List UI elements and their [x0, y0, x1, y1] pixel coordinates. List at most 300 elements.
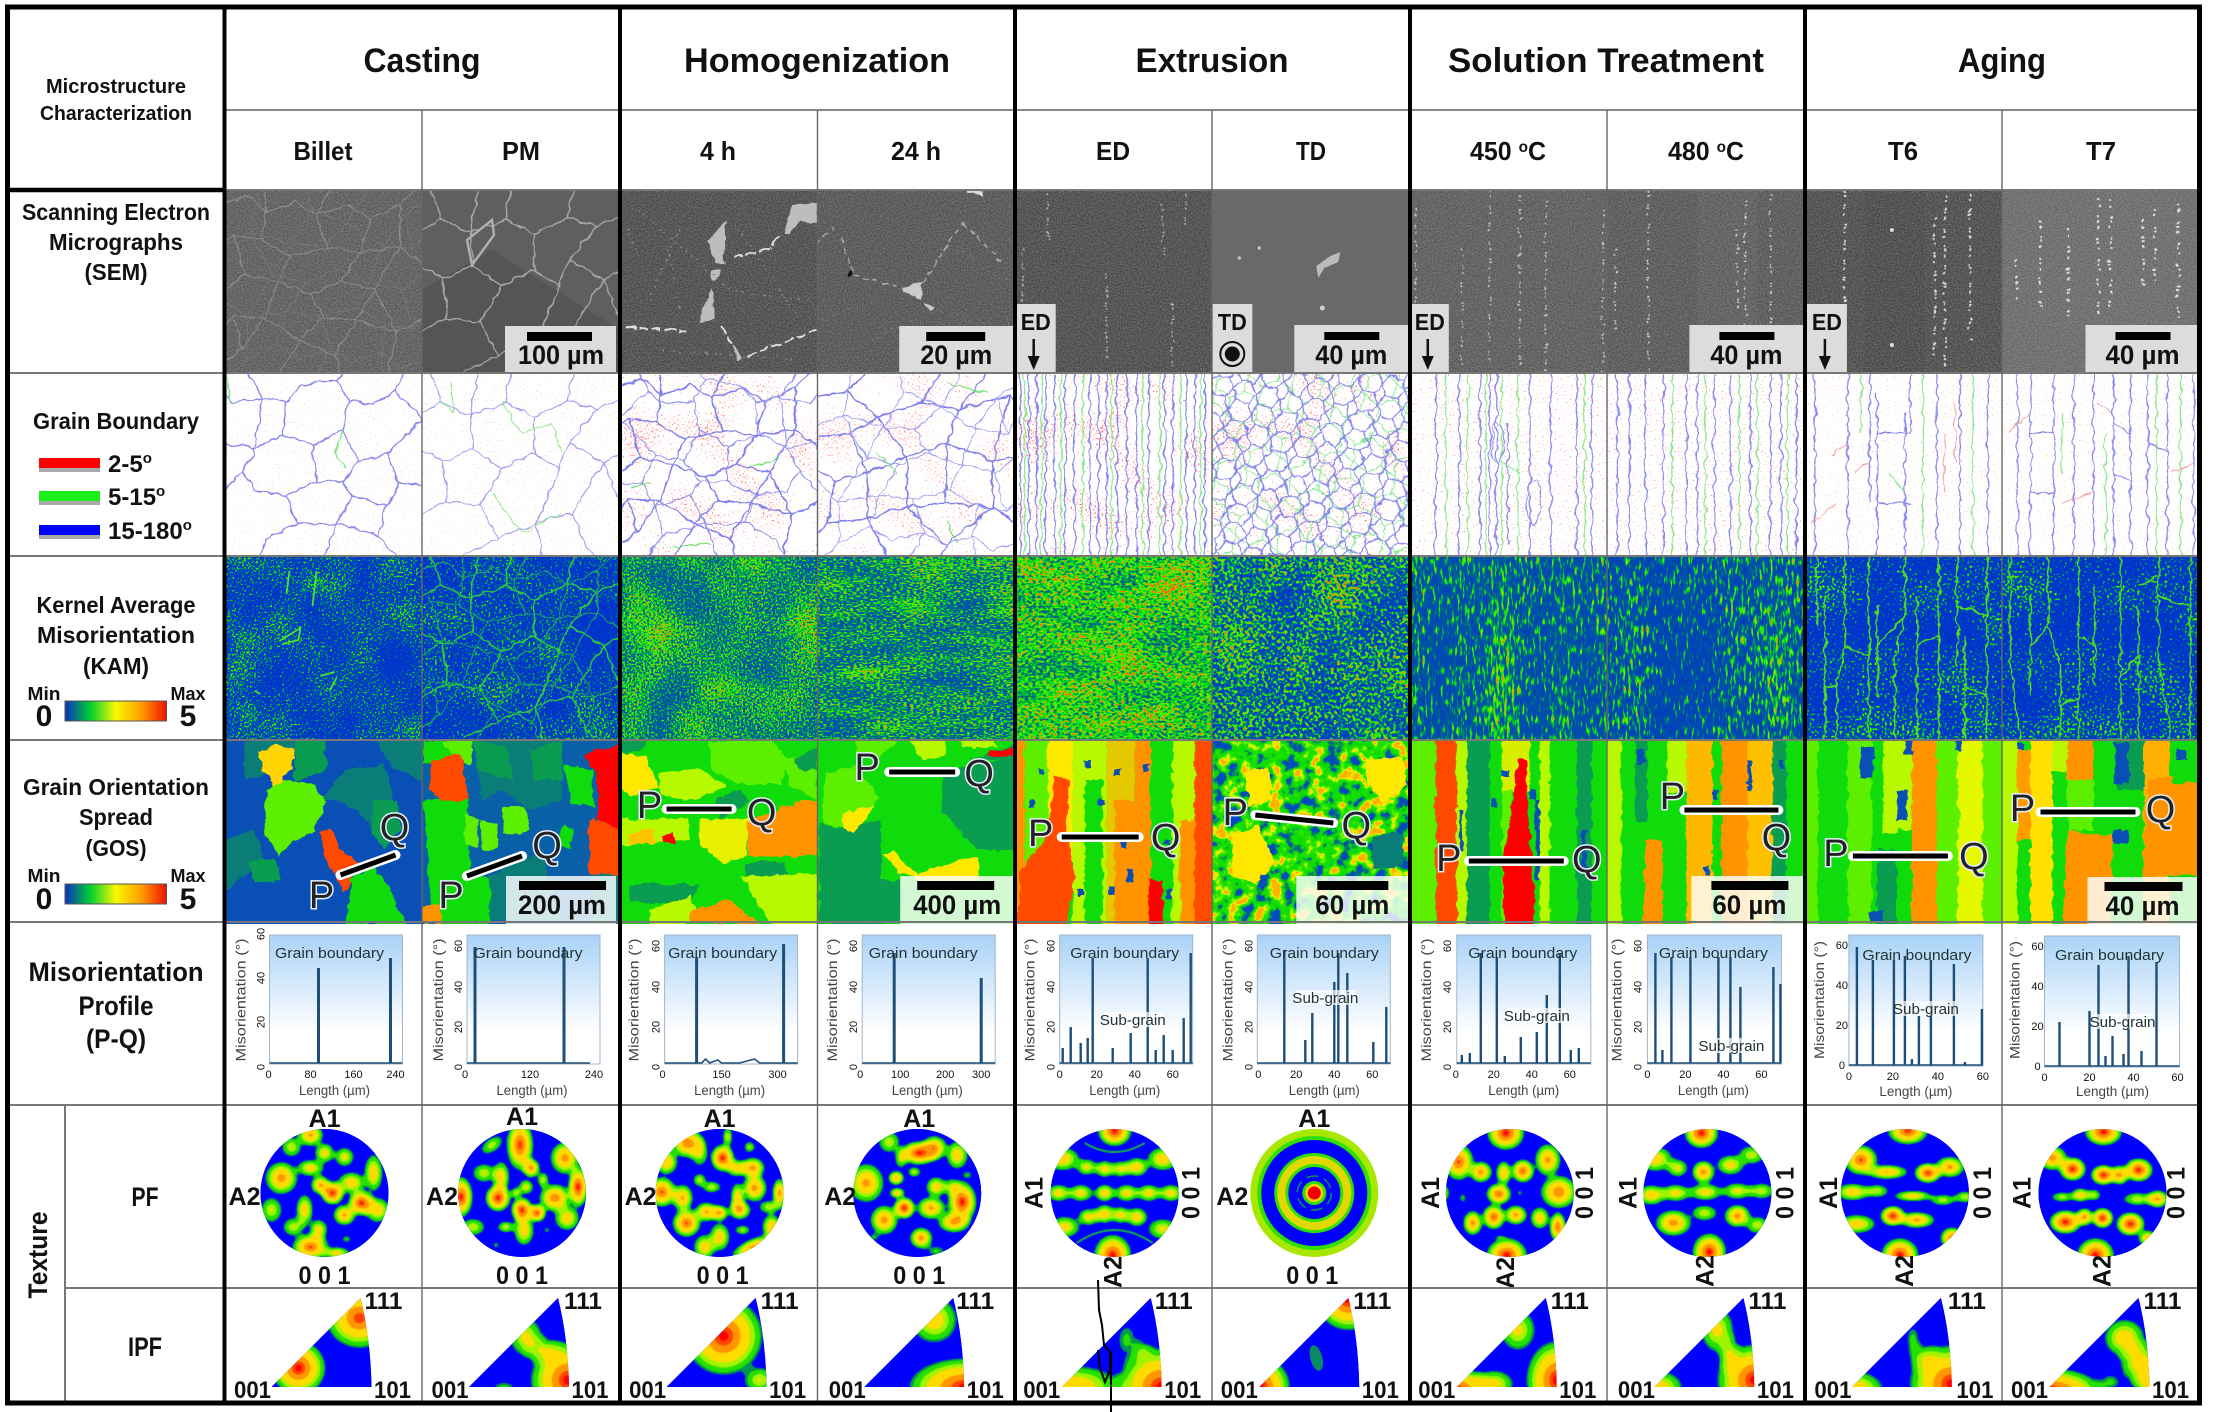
profile chart: Billet: Grain boundary [275, 946, 385, 962]
profile chart: TD: Sub-grain [1292, 991, 1358, 1007]
IPF: 480 C: 101 [1757, 1377, 1794, 1404]
profile chart: Billet: 160 [344, 1069, 363, 1081]
direction marker: TD: TD [1218, 309, 1247, 335]
profile chart: ED: 20 [1091, 1069, 1103, 1081]
IPF: 24 h [817, 1288, 1031, 1412]
KAM: 24 h [817, 556, 1015, 740]
P-Q marker: PM [438, 825, 562, 917]
colour scale: GOS: 5 [180, 883, 196, 916]
IPF: TD: 101 [1362, 1377, 1399, 1404]
panel: KAM row [224, 556, 2200, 740]
scale bar: 40 µm [2106, 891, 2180, 921]
profile chart: 480 C: 20 [1632, 1021, 1644, 1033]
P-Q marker: 24 h [855, 747, 994, 795]
grain boundaries: 4 h [620, 373, 818, 557]
profile chart: T7: 40 [2031, 981, 2044, 993]
profile chart: TD: Grain boundary [1270, 946, 1380, 962]
profile chart: 450 C: Grain boundary [1468, 946, 1578, 962]
pole figure: 4 h: A2 [625, 1183, 657, 1211]
profile chart: T7: 0 [2034, 1061, 2041, 1073]
pole figure: T7: 0 0 1 [2162, 1167, 2190, 1219]
profile chart: T6 [1811, 935, 1989, 1099]
sub-headings: conditions: T6 [1888, 136, 1918, 166]
scale bar [2086, 325, 2198, 374]
profile chart: 480 C: 40 [1717, 1069, 1730, 1081]
IPF: T7: 101 [2152, 1377, 2189, 1404]
P-Q marker: 480 C: Q [1762, 817, 1791, 859]
direction marker: TD [1212, 304, 1252, 374]
KAM: 4 h [620, 556, 818, 740]
heading: Extrusion: Extrusion [1136, 42, 1288, 80]
pole figure: TD [1216, 1105, 1378, 1290]
pole figure: TD: 0 0 1 [1286, 1262, 1338, 1290]
IPF: Billet: 001 [234, 1377, 271, 1404]
scale bar: 40 µm [1315, 340, 1387, 370]
pole figure: Billet: A1 [308, 1105, 341, 1133]
profile chart: T7: Misorientation (°) [2006, 941, 2022, 1059]
profile chart: 450 C: 0 [1453, 1069, 1459, 1081]
IPF: T7: 111 [2144, 1288, 2182, 1315]
panel: row labels [22, 199, 210, 1362]
profile chart: 24 h: 0 [857, 1069, 863, 1081]
scale bar [900, 876, 1015, 924]
direction marker: ED [1410, 304, 1449, 374]
P-Q marker: 24 h: Q [964, 753, 994, 795]
profile chart: PM: Length (µm) [496, 1082, 568, 1098]
GOS: T7 [1996, 732, 2206, 940]
profile chart: 480 C: Sub-grain [1698, 1039, 1764, 1055]
profile chart: 4 h: 20 [651, 1021, 663, 1033]
SEM: 480 C [1607, 190, 1805, 374]
panel: misorientation profile row [232, 928, 2184, 1099]
scale bar [1294, 325, 1410, 374]
colour scale: GOS: Min [28, 866, 60, 886]
IPF: PM: 001 [432, 1377, 468, 1404]
IPF: TD: 001 [1221, 1377, 1258, 1404]
legend: grain boundary angles: 5-15 [108, 484, 156, 511]
direction marker: ED: ED [1021, 309, 1051, 335]
IPF: 4 h [620, 1288, 818, 1404]
profile chart: 450 C: Misorientation (°) [1418, 939, 1434, 1061]
profile chart: 24 h: 60 [848, 940, 860, 952]
pole figure: T6: A2 [1891, 1255, 1919, 1287]
profile chart: T6: Misorientation (°) [1811, 941, 1827, 1059]
profile chart: 4 h: 150 [712, 1069, 731, 1081]
colour scale: KAM [28, 684, 206, 733]
profile chart: Billet: Length (µm) [299, 1082, 370, 1098]
P-Q marker: ED: P [1028, 813, 1053, 855]
profile chart: TD: Misorientation (°) [1219, 939, 1235, 1061]
GOS: TD [1212, 740, 1410, 924]
scale bar: 100 µm [518, 340, 604, 370]
profile chart: 480 C: 60 [1755, 1069, 1768, 1081]
KAM: TD [1212, 556, 1410, 740]
panel: column headers [40, 42, 2116, 166]
profile chart: Billet: 60 [256, 928, 268, 940]
profile chart: Billet: 40 [256, 972, 268, 984]
profile chart: TD: Length (µm) [1289, 1082, 1360, 1098]
GOS: T6 [1799, 732, 2009, 932]
profile chart: T6: 40 [1836, 980, 1848, 992]
KAM: T7 [2002, 556, 2200, 740]
profile chart: Billet: 20 [256, 1016, 268, 1028]
profile chart: T7: Grain boundary [2055, 948, 2165, 964]
profile chart: 4 h: Misorientation (°) [626, 939, 642, 1061]
profile chart: T6: 60 [1977, 1071, 1989, 1083]
row label: GOS: Grain Orientation [23, 774, 209, 800]
pole figure: 4 h [620, 1105, 818, 1290]
profile chart: TD [1219, 935, 1390, 1098]
P-Q marker: T7 [2010, 788, 2175, 831]
scale bar: 20 µm [920, 340, 992, 370]
IPF: 450 C: 111 [1551, 1288, 1589, 1315]
pole figure: 450 C: 0 0 1 [1571, 1167, 1599, 1219]
profile chart: 480 C: 40 [1632, 981, 1644, 993]
scale bar [899, 326, 1015, 374]
stray pen mark [1098, 1280, 1111, 1412]
scale bar [505, 326, 616, 374]
profile chart: TD: 40 [1243, 981, 1255, 993]
GOS: ED [1009, 732, 1219, 932]
pole figure: 24 h: A2 [824, 1183, 856, 1211]
IPF: 480 C [1607, 1288, 1805, 1412]
row label: misorientation profile: Profile [78, 991, 154, 1021]
row label: Texture: Texture [23, 1212, 53, 1298]
pole figure: T7 [2002, 1105, 2200, 1289]
profile chart: Billet: 240 [386, 1069, 405, 1081]
SEM: ED [1015, 190, 1213, 374]
P-Q marker: 480 C [1660, 776, 1791, 859]
profile chart: ED: 40 [1129, 1069, 1141, 1081]
IPF: 24 h: 001 [829, 1377, 866, 1404]
IPF: T7: 001 [2011, 1377, 2048, 1404]
sub-headings: conditions: TD [1296, 136, 1326, 166]
scale bar [506, 876, 616, 924]
profile chart: 4 h: 0 [651, 1064, 663, 1070]
profile chart: T6: Sub-grain [1893, 1002, 1959, 1018]
scale bar: 60 µm [1712, 890, 1786, 920]
legend: grain boundary angles: o [156, 483, 165, 500]
profile chart: Billet: 0 [256, 1064, 268, 1070]
colour scale: KAM: 0 [36, 700, 52, 733]
profile chart: ED: 60 [1167, 1069, 1179, 1081]
pole figure: T6: 0 0 1 [1969, 1167, 1997, 1219]
KAM: Billet [224, 556, 422, 740]
grain boundaries: Billet [224, 373, 422, 557]
pole figure: PM: A2 [426, 1183, 458, 1211]
row label: KAM: (KAM) [83, 653, 149, 679]
heading: Homogenization: Homogenization [684, 42, 950, 80]
profile chart: 24 h: Grain boundary [869, 946, 979, 962]
IPF: 480 C: 001 [1618, 1377, 1655, 1404]
sub-headings: conditions: 450 [1470, 136, 1513, 166]
profile chart: 4 h: Length (µm) [694, 1082, 765, 1098]
profile chart: T7: 60 [2171, 1072, 2184, 1084]
scale bar: 40 µm [1710, 340, 1782, 370]
scale bar [1691, 876, 1803, 924]
P-Q marker: Billet: Q [380, 807, 409, 849]
grain boundaries: 450 C [1410, 373, 1608, 557]
row label: misorientation profile [28, 957, 204, 1054]
row label: SEM: Scanning Electron [22, 199, 210, 225]
pole figure: 480 C [1607, 1105, 1805, 1289]
pole figure: PM: A1 [506, 1103, 538, 1131]
pole figure: 4 h: A1 [704, 1105, 736, 1133]
grain boundaries: TD [1212, 373, 1410, 557]
IPF: 4 h: 001 [629, 1377, 666, 1404]
grain boundaries: T7 [2002, 373, 2200, 557]
profile chart: 450 C: 20 [1442, 1021, 1454, 1033]
sub-headings: conditions: T7 [2086, 136, 2116, 166]
P-Q marker: T6: Q [1959, 836, 1989, 878]
scale bar: 400 µm [913, 890, 1001, 920]
pole figure: ED: 0 0 1 [1178, 1167, 1206, 1219]
IPF: TD [1212, 1260, 1410, 1412]
IPF: 24 h: 111 [956, 1288, 994, 1315]
profile chart: 450 C: 40 [1442, 981, 1454, 993]
panel: P-Q line markers [309, 747, 2175, 917]
pole figure: ED: A2 [1100, 1256, 1128, 1288]
profile chart: 4 h: Grain boundary [668, 946, 778, 962]
profile chart: TD: 40 [1328, 1069, 1340, 1081]
profile chart: Billet: 0 [265, 1069, 272, 1081]
colour scale: GOS: Max [170, 866, 206, 886]
P-Q marker: Billet: P [309, 875, 334, 917]
sub-headings: conditions: 24 h [891, 136, 941, 166]
profile chart: 24 h: Misorientation (°) [824, 939, 840, 1061]
profile chart: 24 h: 40 [848, 981, 860, 993]
sub-headings: conditions: o [1519, 139, 1528, 156]
pole figure: 450 C: A2 [1492, 1257, 1520, 1289]
sub-headings: conditions [294, 136, 2116, 166]
IPF: ED: 111 [1155, 1288, 1193, 1315]
profile chart: PM: 0 [462, 1069, 468, 1081]
IPF: 24 h: 101 [967, 1377, 1004, 1404]
GOS: 24 h [817, 740, 1015, 924]
SEM: 4 h [620, 190, 818, 374]
IPF: T6 [1805, 1288, 2003, 1412]
profile chart: T7: Length (µm) [2076, 1083, 2149, 1099]
legend: grain boundary angles: 15-180 [108, 518, 183, 545]
KAM: ED [1015, 556, 1213, 740]
grain boundaries: 24 h [817, 373, 1015, 557]
legend: grain boundary angles: o [143, 450, 152, 467]
row label: KAM: Misorientation [37, 622, 195, 648]
profile chart: ED: 60 [1046, 940, 1058, 952]
profile chart: ED: Length (µm) [1089, 1082, 1160, 1098]
profile chart: 450 C: Sub-grain [1504, 1009, 1570, 1025]
P-Q marker: 450 C: P [1436, 838, 1461, 880]
profile chart: TD: 60 [1243, 940, 1255, 952]
pole figure: T7: A2 [2088, 1255, 2116, 1287]
IPF: 4 h: 111 [761, 1288, 799, 1315]
scale bar [1296, 876, 1408, 924]
P-Q marker: 24 h: P [855, 747, 880, 789]
panel: GOS row [224, 732, 2206, 940]
P-Q marker: TD: P [1223, 792, 1248, 834]
profile chart: T6: 20 [1887, 1071, 1899, 1083]
scale bar: 60 µm [1315, 890, 1389, 920]
row label: misorientation profile: Misorientation [28, 957, 204, 987]
pole figure: 450 C: A1 [1417, 1177, 1445, 1209]
panel: grain boundary row [224, 373, 2200, 557]
profile chart: 480 C: 20 [1679, 1069, 1692, 1081]
pole figure: Billet [224, 1105, 422, 1290]
pole figure: 450 C [1410, 1105, 1608, 1289]
row label: KAM [36, 592, 196, 679]
GOS: PM [422, 740, 620, 924]
P-Q marker: TD: Q [1342, 805, 1371, 847]
profile chart: TD: 0 [1255, 1069, 1261, 1081]
SEM: 450 C [1410, 190, 1608, 374]
colour scale: KAM: Max [170, 684, 206, 704]
P-Q marker: ED: Q [1151, 817, 1180, 859]
profile chart: PM: Grain boundary [474, 946, 583, 962]
profile chart: PM [430, 935, 603, 1098]
profile chart: 480 C: 60 [1632, 940, 1644, 952]
profile chart: 480 C: Misorientation (°) [1608, 939, 1624, 1061]
sub-headings: conditions: 480 [1668, 136, 1711, 166]
profile chart: 24 h: 300 [972, 1069, 990, 1081]
profile chart: 480 C: Grain boundary [1659, 946, 1769, 962]
profile chart: T6: 60 [1836, 940, 1848, 952]
IPF: 480 C: 111 [1748, 1288, 1786, 1315]
profile chart: 450 C: 40 [1526, 1069, 1538, 1081]
profile chart: Billet: 80 [304, 1069, 317, 1081]
IPF: PM: 111 [564, 1288, 602, 1315]
profile chart: TD: 20 [1290, 1069, 1302, 1081]
direction marker: ED [1017, 304, 1056, 374]
row label: IPF: IPF [128, 1332, 162, 1362]
P-Q marker: 4 h [637, 785, 776, 834]
pole figure: 24 h: A1 [903, 1105, 935, 1133]
pole figure: ED [1015, 1105, 1213, 1289]
P-Q marker: PM: P [438, 875, 464, 917]
profile chart: 480 C: 0 [1644, 1069, 1650, 1081]
sub-headings: conditions: C [1528, 136, 1546, 166]
profile chart: 450 C: 20 [1488, 1069, 1500, 1081]
profile chart: T6: 0 [1839, 1060, 1845, 1072]
profile chart: T7: 60 [2031, 941, 2044, 953]
P-Q marker: 4 h: P [637, 785, 662, 827]
row label: grain boundary: Grain Boundary [33, 408, 199, 434]
pole figure: Billet: A2 [228, 1183, 260, 1211]
row label: PF: PF [132, 1182, 158, 1212]
pole figure: Billet: 0 0 1 [298, 1262, 351, 1290]
scale bar [1689, 325, 1805, 374]
profile chart: ED: 20 [1046, 1021, 1058, 1033]
GOS: Billet [224, 740, 422, 924]
sub-headings: conditions: ED [1096, 136, 1130, 166]
profile chart: PM: 20 [453, 1021, 465, 1033]
profile chart: 24 h: Length (µm) [892, 1082, 963, 1098]
row label: SEM [22, 199, 210, 285]
colour scale: GOS: 0 [36, 883, 52, 916]
P-Q marker: 4 h: Q [747, 792, 776, 834]
profile chart: PM: Misorientation (°) [430, 939, 446, 1061]
pole figure: T7: A1 [2008, 1177, 2036, 1209]
SEM: TD [1212, 190, 1410, 374]
sub-headings: conditions: 4 h [700, 136, 736, 166]
P-Q marker: ED [1028, 813, 1180, 859]
profile chart: TD: 0 [1243, 1064, 1255, 1070]
SEM: Billet [224, 190, 422, 374]
profile chart: ED: 40 [1046, 981, 1058, 993]
grain boundaries: T6 [1805, 373, 2003, 557]
grain boundaries: 480 C [1607, 373, 1805, 557]
profile chart: T7: 0 [2041, 1072, 2048, 1084]
IPF: ED: 001 [1023, 1377, 1060, 1404]
row label: KAM: Kernel Average [36, 592, 196, 618]
profile chart: ED: 0 [1057, 1069, 1063, 1081]
IPF: PM: 101 [572, 1377, 608, 1404]
P-Q marker: T6: P [1823, 833, 1849, 875]
pole figure: PM: 0 0 1 [496, 1262, 548, 1290]
profile chart: 480 C: 0 [1632, 1064, 1644, 1070]
P-Q marker: T7: Q [2146, 789, 2175, 831]
profile chart: Billet: Misorientation (°) [232, 939, 248, 1061]
heading: Solution Treatment: Solution Treatment [1448, 42, 1764, 80]
IPF: TD: 111 [1353, 1288, 1391, 1315]
heading: table title: Microstructure [46, 76, 186, 98]
profile chart: ED [1022, 935, 1193, 1098]
scale bar [2088, 877, 2198, 924]
row label: GOS: (GOS) [86, 835, 146, 861]
IPF: 450 C: 001 [1418, 1377, 1455, 1404]
IPF: 450 C [1410, 1288, 1608, 1412]
profile chart: T6: Length (µm) [1879, 1083, 1952, 1099]
IPF: PM [422, 1288, 620, 1412]
GOS: 480 C [1601, 732, 1811, 932]
direction marker: ED: ED [1415, 309, 1445, 335]
legend: grain boundary angles: 2-5 [108, 451, 143, 478]
profile chart: PM: 240 [585, 1069, 603, 1081]
IPF: T7 [1990, 1288, 2200, 1412]
panel: pole figure row [224, 1103, 2200, 1290]
P-Q marker: T6 [1823, 833, 1989, 878]
P-Q marker: 480 C: P [1660, 776, 1685, 818]
profile chart: T7: 20 [2031, 1021, 2044, 1033]
sub-headings: conditions: Billet [294, 136, 353, 166]
colour scale: KAM: 5 [180, 700, 196, 733]
pole figure: 24 h [817, 1105, 1015, 1290]
SEM: PM [422, 190, 620, 374]
legend: grain boundary angles [39, 450, 192, 545]
profile chart: ED: 0 [1046, 1064, 1058, 1070]
profile chart: T6: 40 [1932, 1071, 1944, 1083]
pole figure: TD: A2 [1216, 1183, 1248, 1211]
IPF: T6: 101 [1956, 1377, 1993, 1404]
profile chart: 24 h: 0 [848, 1064, 860, 1070]
KAM: 450 C [1410, 556, 1608, 740]
profile chart: 24 h [824, 935, 995, 1098]
direction marker: ED: ED [1812, 309, 1842, 335]
profile chart: T7 [2006, 936, 2184, 1099]
grain boundaries: ED [1015, 373, 1213, 557]
profile chart: PM: 40 [453, 981, 465, 993]
IPF: T6: 111 [1948, 1288, 1986, 1315]
grain boundaries: PM [422, 373, 620, 557]
IPF: ED [1015, 1288, 1214, 1412]
profile chart: TD: 60 [1366, 1069, 1378, 1081]
colour scale: KAM: Min [28, 684, 60, 704]
row label: misorientation profile: (P-Q) [86, 1024, 146, 1054]
profile chart: T6: Grain boundary [1862, 948, 1972, 964]
P-Q marker: Billet [309, 807, 409, 917]
pole figure: 24 h: 0 0 1 [893, 1262, 945, 1290]
pole figure: TD: A1 [1298, 1105, 1330, 1133]
profile chart: 480 C: Length (µm) [1678, 1082, 1749, 1098]
